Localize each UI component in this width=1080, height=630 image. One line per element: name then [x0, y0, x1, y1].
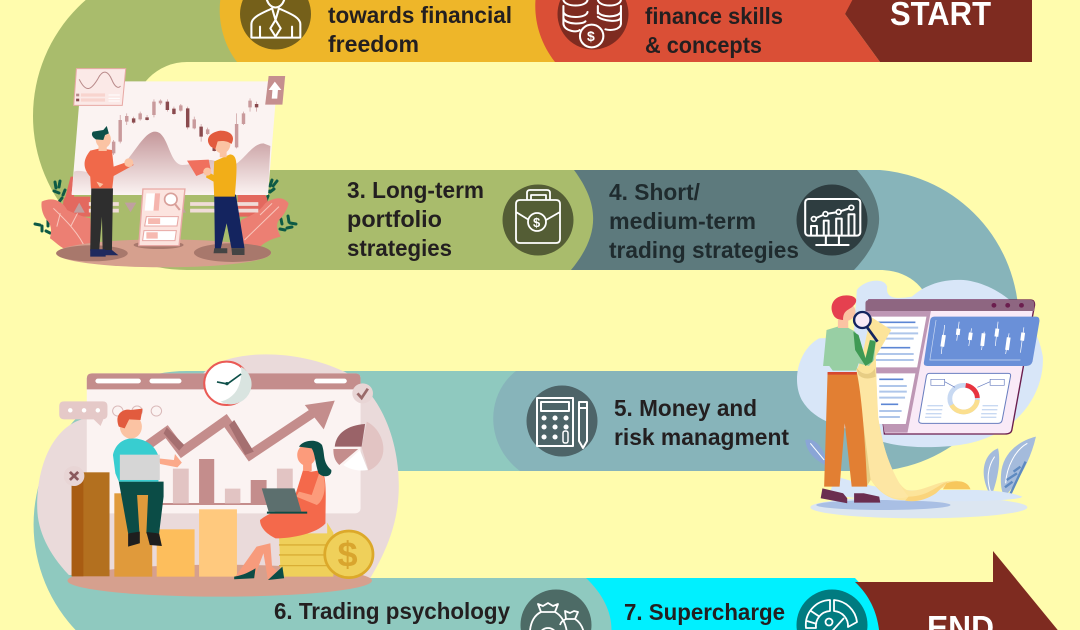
step 4 text — [609, 179, 799, 263]
step 5 text: risk managment — [614, 424, 789, 450]
up arrow card — [265, 76, 285, 105]
step 1 text: freedom — [328, 31, 419, 57]
icon: money bags — [520, 590, 592, 630]
end arrow — [855, 551, 1070, 630]
illustration: two traders on bar chart — [37, 354, 399, 597]
mountain chart — [72, 132, 270, 195]
start arrow — [845, 0, 1032, 62]
icon: coin stacks — [558, 0, 628, 50]
dashboard panel — [865, 300, 1035, 434]
plants — [805, 437, 1036, 501]
step 5 text — [614, 395, 789, 450]
red lobes behind panel — [63, 177, 268, 217]
ground — [810, 496, 1027, 518]
plants — [41, 198, 289, 252]
shadows — [56, 241, 271, 262]
small sine chart card — [74, 69, 126, 105]
icon: calculator and pencil — [526, 386, 598, 456]
document card — [139, 189, 185, 246]
check badge — [352, 383, 373, 403]
pie chart — [333, 422, 383, 471]
step 1: yellow segment — [220, 0, 570, 62]
woman in yellow shirt — [187, 131, 245, 255]
icon: monitor with chart — [796, 184, 868, 256]
illustration: analyst with scroll and dashboard — [797, 280, 1043, 518]
step 4 text: medium-term — [609, 208, 756, 234]
path band: lower teal U-turn and step 6 — [34, 371, 640, 630]
candlesticks — [114, 98, 257, 155]
blue blobs — [797, 280, 1043, 447]
step 5 marker — [493, 371, 789, 471]
path band: teal turn and step 5 — [500, 170, 1019, 471]
man with laptop — [113, 409, 182, 547]
ground shadow — [816, 500, 951, 510]
step 4: dark teal segment — [571, 170, 879, 270]
cross badge — [64, 466, 84, 486]
step 2 text: finance skills — [645, 3, 783, 29]
clock — [204, 362, 252, 405]
step 6 text: 6. Trading psychology — [274, 598, 510, 624]
path band: upper green U-turn and step 3 — [33, 0, 600, 270]
step 7: cyan segment — [586, 578, 880, 630]
man in red shirt — [85, 126, 134, 257]
ground — [56, 239, 271, 267]
chat bubble — [59, 401, 162, 426]
step 2 text: & concepts — [645, 32, 762, 58]
step 4 text: trading strategies — [609, 237, 799, 263]
step 2 text — [645, 3, 783, 58]
icon: coin stacks: $ — [587, 28, 595, 44]
growth arrow — [148, 401, 335, 455]
browser window — [87, 373, 361, 513]
woman with laptop and coins — [234, 441, 373, 580]
analyst figure — [821, 295, 880, 503]
step 3 text: strategies — [347, 235, 452, 261]
icon: percentage pie — [796, 590, 868, 630]
icon: briefcase: $ — [533, 215, 541, 230]
step 5 text: 5. Money and — [614, 395, 757, 421]
woman with laptop and coins: $ — [338, 535, 358, 575]
icon: businessman — [240, 0, 311, 50]
ground — [68, 565, 372, 597]
step 4 text: 4. Short/ — [609, 179, 701, 205]
step 3 text — [347, 177, 484, 261]
step 3 text: portfolio — [347, 206, 442, 232]
blue candlestick card — [924, 317, 1039, 366]
illustration: traders with candlestick chart — [41, 69, 289, 267]
chart panel — [72, 81, 277, 195]
brown bars — [72, 472, 237, 577]
step 1 text — [328, 2, 512, 57]
step 7 text: 7. Supercharge — [624, 599, 785, 625]
step 3 text: 3. Long-term — [347, 177, 484, 203]
blob background — [37, 354, 399, 578]
triangles and labels beneath chart — [74, 203, 258, 213]
icon: briefcase — [502, 184, 574, 256]
magnifying glass — [854, 312, 878, 342]
small dark green leaves — [35, 180, 296, 233]
scroll paper — [856, 317, 970, 501]
step 1 text: towards financial — [328, 2, 512, 28]
step 2: red segment — [535, 0, 880, 62]
donut chart card — [919, 373, 1011, 423]
mini bar chart — [162, 459, 296, 504]
